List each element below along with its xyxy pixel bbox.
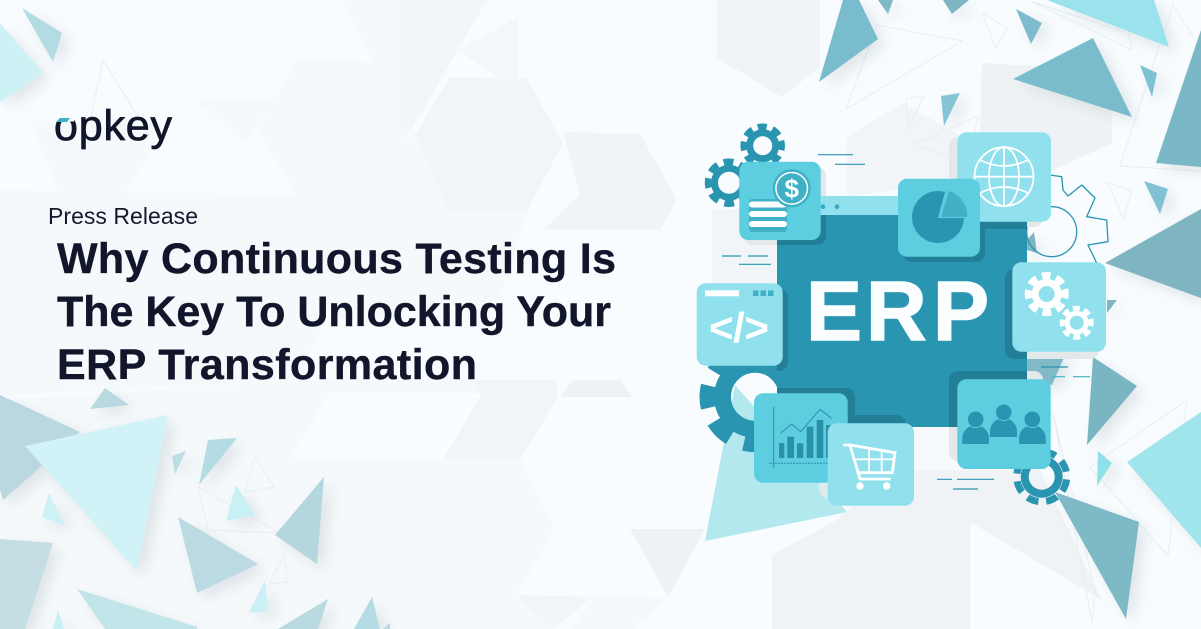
icon: pie chart (912, 191, 967, 243)
ERP label: E (806, 264, 862, 358)
card shadows on panel (777, 215, 1027, 427)
label: press release: Press Release (48, 203, 198, 229)
large light triangle behind chart (705, 385, 847, 541)
ERP label: R (866, 264, 927, 358)
card shadows on background (744, 137, 1099, 498)
icon: chart (769, 407, 832, 468)
outline gear (1027, 175, 1108, 263)
motion lines (722, 155, 1090, 489)
decorative triangles: right side (819, 0, 1201, 619)
card: bar and line chart (754, 393, 848, 483)
gear: top (740, 123, 786, 169)
card: pie chart (898, 179, 980, 257)
decorative triangles: bottom left (0, 388, 390, 629)
title: The Key To Unlocking Your (57, 288, 611, 336)
card: dollar and coins (739, 162, 821, 240)
card: globe (957, 132, 1051, 222)
card: team (957, 379, 1051, 469)
title: ERP Transformation (57, 341, 477, 389)
icon: dollar coin: $ (784, 174, 799, 204)
title (57, 235, 616, 389)
gear: large lower left (698, 340, 812, 453)
main ERP panel (777, 196, 1027, 427)
ERP label: P (933, 264, 989, 358)
icon: shopping cart (843, 445, 895, 490)
icon: people (962, 404, 1046, 444)
icon: code brackets: </> (709, 304, 769, 351)
icon: coin stack (749, 199, 787, 232)
icon: gears (1024, 272, 1094, 340)
card: settings gears (1012, 262, 1106, 352)
title: Why Continuous Testing Is (57, 235, 616, 283)
logo: opkey (54, 102, 172, 150)
decorative triangles: top left (0, 8, 62, 102)
gear: lower right (1013, 448, 1070, 505)
gear: left (704, 157, 754, 208)
card: code window (697, 283, 783, 366)
icon: globe (974, 147, 1034, 206)
card: shopping cart (828, 423, 914, 506)
